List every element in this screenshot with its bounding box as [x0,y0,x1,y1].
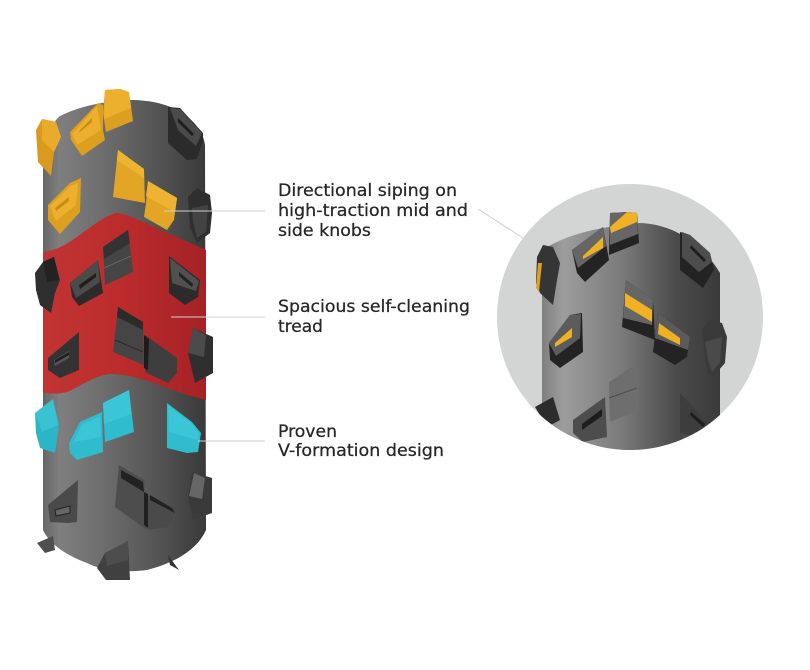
blue knobs [35,390,201,460]
zoomed left knob [536,245,560,305]
bottom right spike [168,555,179,570]
lower centre knob left [115,465,147,530]
blue right knob [167,403,201,453]
label: self-cleaning tread: Spacious self-cleaning [278,297,470,316]
zoomed lower knob left [573,397,607,442]
upper centre knob left [70,260,103,306]
zoomed bottom left knob [535,397,560,427]
leader line: V-formation [198,440,265,442]
yellow low side knob [48,178,81,234]
label: directional siping: high-traction mid and [278,201,468,220]
yellow centre knob 1 [70,103,105,156]
lower right knob [188,472,212,520]
zoomed lower knob right [608,371,637,422]
zoomed top knob left [572,227,609,282]
label: V-formation: Proven [278,422,337,441]
label: directional siping: Directional siping on [278,181,457,200]
zoomed top knob right [609,212,639,255]
zoomed top right knob [680,232,714,288]
yellow side knob [36,119,61,176]
yellow centre knob 2 [103,89,133,132]
lower right knob [188,328,213,383]
zoomed bottom right knob [680,394,705,436]
bottom centre knob [97,541,130,580]
leader line: detail circle [478,209,523,238]
dark knob right edge [188,188,212,243]
upper centre knob right [103,230,133,285]
zoomed tire section [535,212,727,460]
yellow mid knob 1 [113,150,145,203]
zoomed left low knob [549,313,583,368]
leader line: siping [164,210,265,212]
lower left knob [48,332,79,378]
yellow mid knob 2 [144,181,177,230]
lower centre knob right [144,335,177,383]
dark knob top right [168,107,203,160]
leader line: tread [171,316,265,318]
lower centre knob left [113,307,144,365]
blue centre knob right [103,390,134,442]
tire body [43,100,206,571]
detail circle [497,184,763,460]
zoomed tire body [542,223,720,460]
bottom left spike [37,536,55,553]
dark knobs in red zone [35,230,213,383]
right knob [169,256,200,305]
label: self-cleaning tread: tread [278,317,323,336]
infographic canvas [35,89,763,580]
zoomed right knob [705,322,727,372]
yellow knobs [36,89,177,234]
zoomed centre knob left [622,280,655,340]
label: directional siping: side knobs [278,221,371,240]
label: V-formation: V-formation design [278,441,444,460]
left edge knob [35,257,60,313]
circle background [497,184,763,450]
lower left knob [48,480,78,523]
blue side knob [35,399,59,453]
dark top-right knobs [168,107,212,243]
red tread zone [43,213,206,400]
zoomed centre knob right [653,313,690,365]
dark lower knobs [37,465,212,580]
lower centre knob right [144,492,175,530]
blue centre knob left [69,412,103,460]
tire illustration [35,89,213,580]
